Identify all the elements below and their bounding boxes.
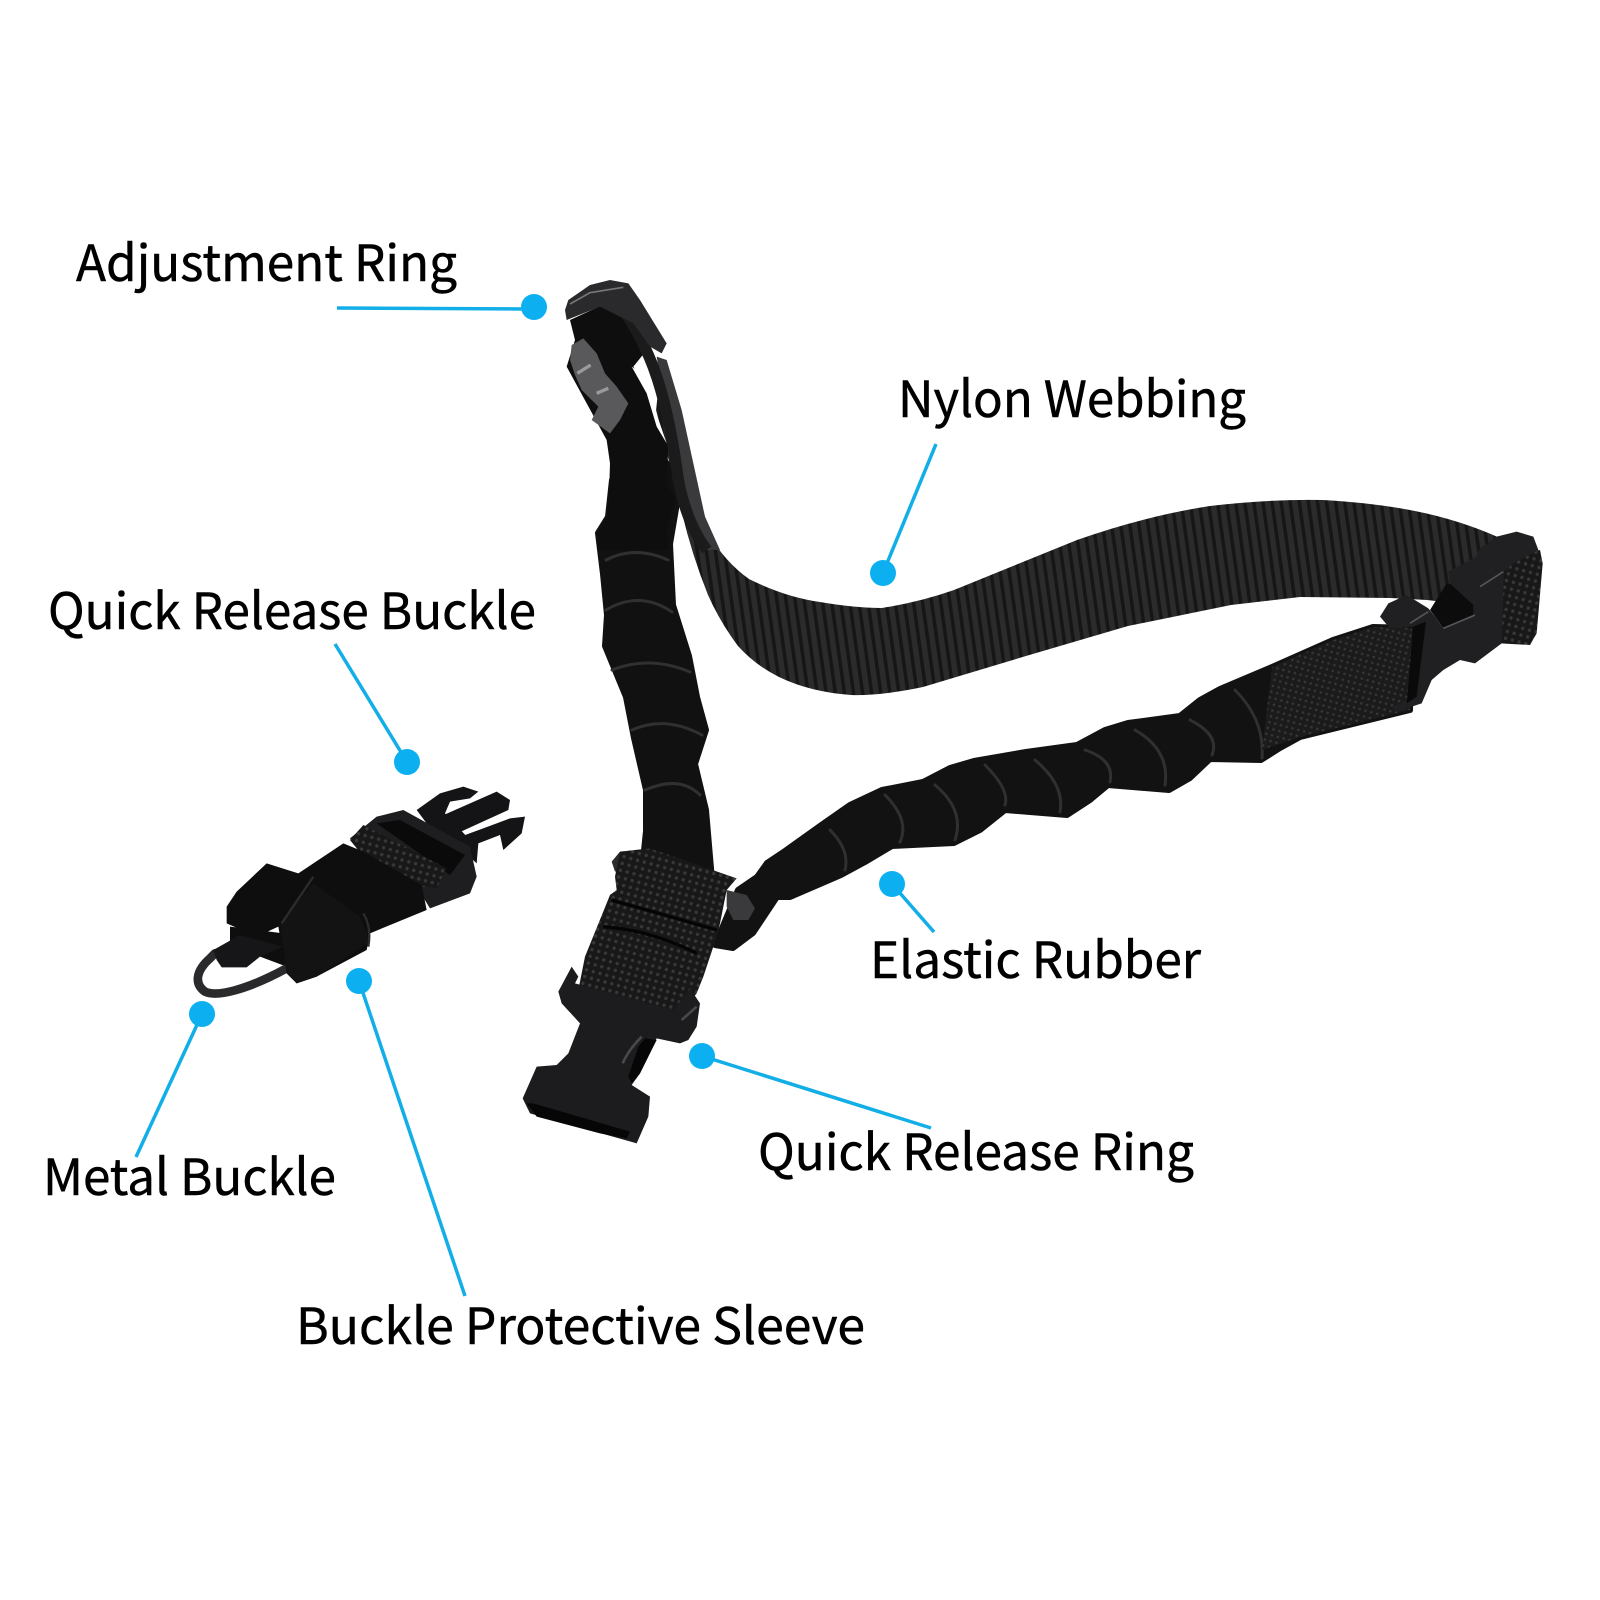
label: Nylon Webbing: Nylon Webbing — [898, 360, 1246, 432]
buckle window — [1407, 622, 1426, 703]
ring highlight — [623, 1007, 697, 1063]
grey slider buckle — [570, 338, 628, 433]
sleeve flap — [280, 883, 370, 983]
quick release buckle at strap end — [1380, 532, 1543, 712]
buckle prongs — [417, 787, 525, 863]
grey strap end — [657, 357, 720, 550]
left nub — [612, 852, 623, 872]
label: Buckle Protective Sleeve — [296, 968, 865, 1359]
looped webbing — [1500, 550, 1543, 645]
label: Adjustment Ring: Adjustment Ring — [76, 224, 457, 296]
left elastic rubber section — [598, 430, 712, 880]
adjustment ring bar — [565, 280, 667, 353]
buckle frame — [350, 810, 477, 908]
metal hook — [198, 953, 287, 994]
bungee connector — [727, 890, 755, 920]
braided strap edge — [617, 300, 707, 550]
label: Quick Release Buckle: Quick Release Buckle — [48, 572, 536, 644]
quick release ring body — [523, 967, 700, 1143]
adjustment ring highlight — [570, 287, 623, 304]
adjustment ring and top strap — [565, 280, 720, 550]
protective sleeve — [227, 843, 427, 983]
label: Nylon Webbing — [870, 360, 1246, 586]
strap webbing — [350, 825, 447, 888]
label: Metal Buckle: Metal Buckle — [43, 1138, 336, 1210]
detached buckle assembly — [198, 787, 525, 994]
buckle highlight — [1410, 572, 1503, 628]
label: Elastic Rubber: Elastic Rubber — [870, 921, 1202, 993]
label: Buckle Protective Sleeve: Buckle Protective Sleeve — [296, 1287, 865, 1359]
slider detail — [577, 365, 608, 393]
right elastic rubber section — [715, 627, 1412, 948]
label: Metal Buckle — [43, 1001, 336, 1210]
ring side opening — [628, 1038, 657, 1083]
frame opening — [377, 820, 465, 875]
strap gap — [632, 367, 667, 443]
nylon webbing strap — [656, 359, 1500, 695]
ring slot — [527, 1103, 630, 1138]
lower webbing tab and quick release ring — [523, 848, 755, 1143]
stitching — [603, 900, 717, 953]
buckle prong — [1430, 583, 1475, 628]
buckle frame — [1380, 532, 1538, 712]
label: Elastic Rubber — [870, 871, 1202, 993]
hook bar — [213, 935, 283, 967]
label: Adjustment Ring — [76, 224, 547, 320]
webbing tab — [578, 848, 737, 1020]
hook top fill — [230, 927, 287, 967]
label: Quick Release Ring: Quick Release Ring — [758, 1113, 1194, 1185]
label: Quick Release Ring — [689, 1043, 1194, 1185]
black sewn strap body — [567, 300, 675, 550]
label: Quick Release Buckle — [48, 572, 536, 775]
